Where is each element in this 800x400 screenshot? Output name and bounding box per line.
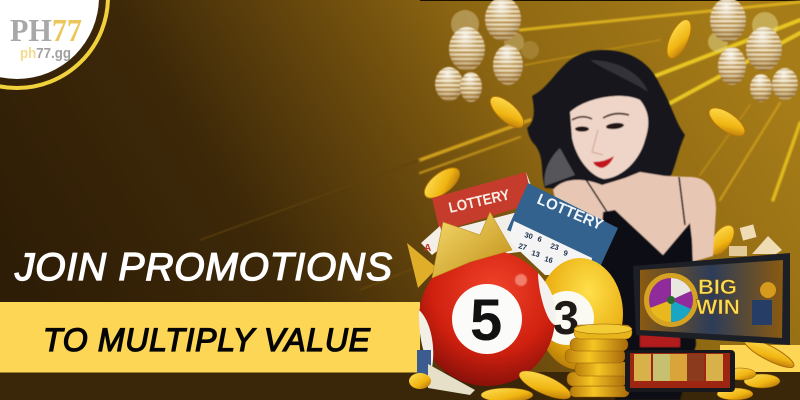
golden light rays (200, 2, 800, 290)
lottery numbers: 30 (523, 230, 534, 241)
eyes (575, 126, 589, 132)
dress (600, 210, 696, 400)
poker chips (409, 350, 475, 395)
logo badge (0, 0, 108, 88)
lottery card: red: A (424, 243, 431, 254)
yellow lottery ball (537, 258, 623, 370)
lottery numbers: 6 (536, 234, 543, 244)
tablet: big win (633, 253, 790, 345)
heading: join promotions: JOIN PROMOTIONS (14, 246, 392, 289)
subheading: to multiply value: TO MULTIPLY VALUE (43, 322, 371, 358)
lottery numbers: 27 (517, 241, 528, 252)
lips (593, 156, 614, 168)
yellow ribbon (0, 302, 420, 372)
lottery numbers: 16 (543, 254, 554, 265)
balloons: left cluster (435, 0, 539, 102)
tablet: big win: WIN (696, 296, 740, 319)
ball number 5: 5 (470, 288, 502, 353)
balloons: right cluster (708, 0, 798, 102)
prize wheel (644, 273, 698, 327)
face (570, 96, 648, 179)
red lottery ball (419, 250, 556, 386)
red card label: LOTTERY (447, 186, 511, 217)
lottery numbers: 9 (562, 248, 569, 258)
phone: slot game (625, 350, 735, 392)
lottery numbers (517, 230, 569, 265)
gift boxes (729, 224, 782, 256)
body (553, 172, 716, 345)
blue card label: LOTTERY (534, 191, 606, 234)
front coins (481, 365, 780, 400)
woman (527, 50, 716, 400)
gold coin stack (565, 324, 633, 397)
big win text: BIG (698, 276, 737, 299)
lottery numbers: 23 (549, 241, 560, 252)
logo domain: ph77.gg (20, 45, 71, 62)
lottery card: blue (507, 183, 618, 275)
ball number 3: 3 (553, 291, 579, 344)
hair (527, 50, 685, 190)
lottery card: red (421, 172, 545, 260)
logo wordmark: PH77 (10, 12, 82, 48)
flying coins (419, 16, 797, 372)
gold crown (407, 212, 512, 288)
lottery numbers: 13 (530, 248, 541, 259)
